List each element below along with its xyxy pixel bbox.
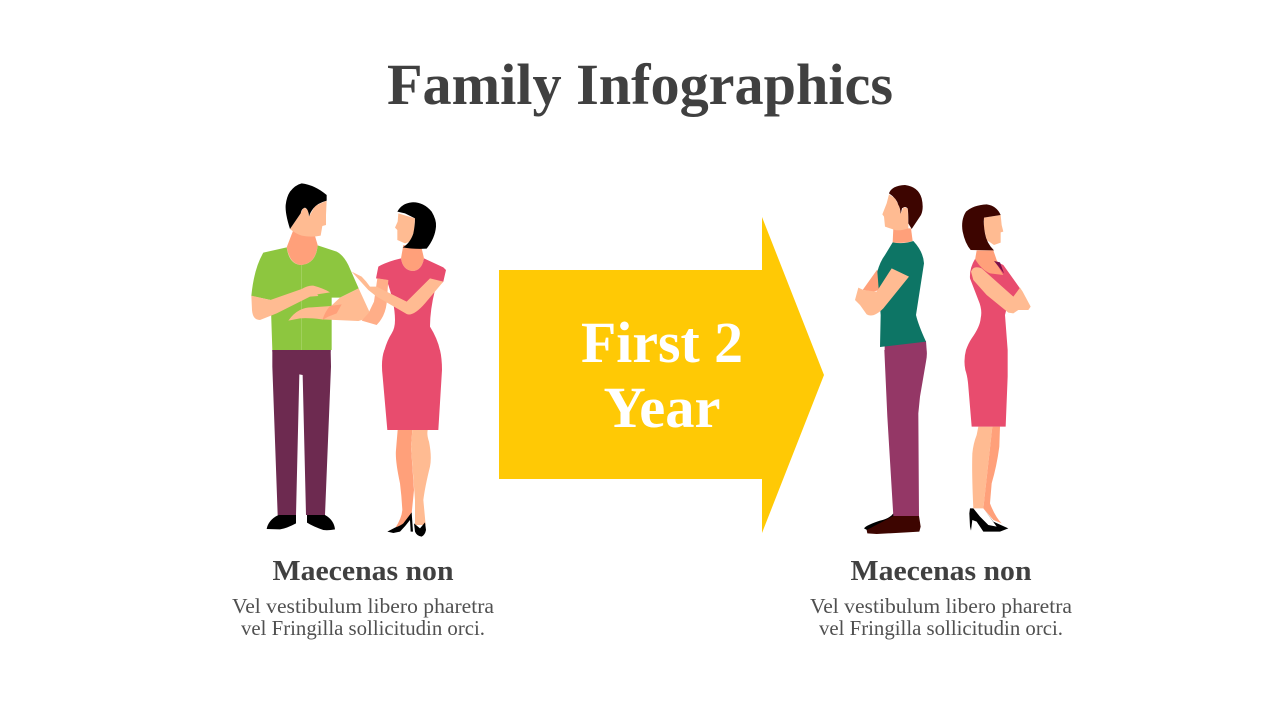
arrow label: First 2 [581,310,743,375]
right body text [810,594,1072,640]
illustration: couple talking [251,183,446,537]
man in teal shirt [855,185,927,534]
left caption [232,555,494,640]
arrow label [581,310,743,440]
right body text: vel Fringilla sollicitudin orci. [819,616,1063,640]
arrow: first 2 year [499,217,824,533]
right caption [810,555,1072,640]
man in green shirt [251,183,369,530]
left body text: Vel vestibulum libero pharetra [232,594,494,618]
title: Family Infographics [387,52,893,117]
woman in pink dress, arms crossed [962,204,1031,532]
left body text [232,594,494,640]
left body text: vel Fringilla sollicitudin orci. [241,616,485,640]
left heading: Maecenas non [272,555,454,587]
illustration: couple back to back [855,185,1031,534]
arrow label: Year [604,375,720,440]
woman in pink dress [352,202,446,537]
right body text: Vel vestibulum libero pharetra [810,594,1072,618]
right heading: Maecenas non [850,555,1032,587]
